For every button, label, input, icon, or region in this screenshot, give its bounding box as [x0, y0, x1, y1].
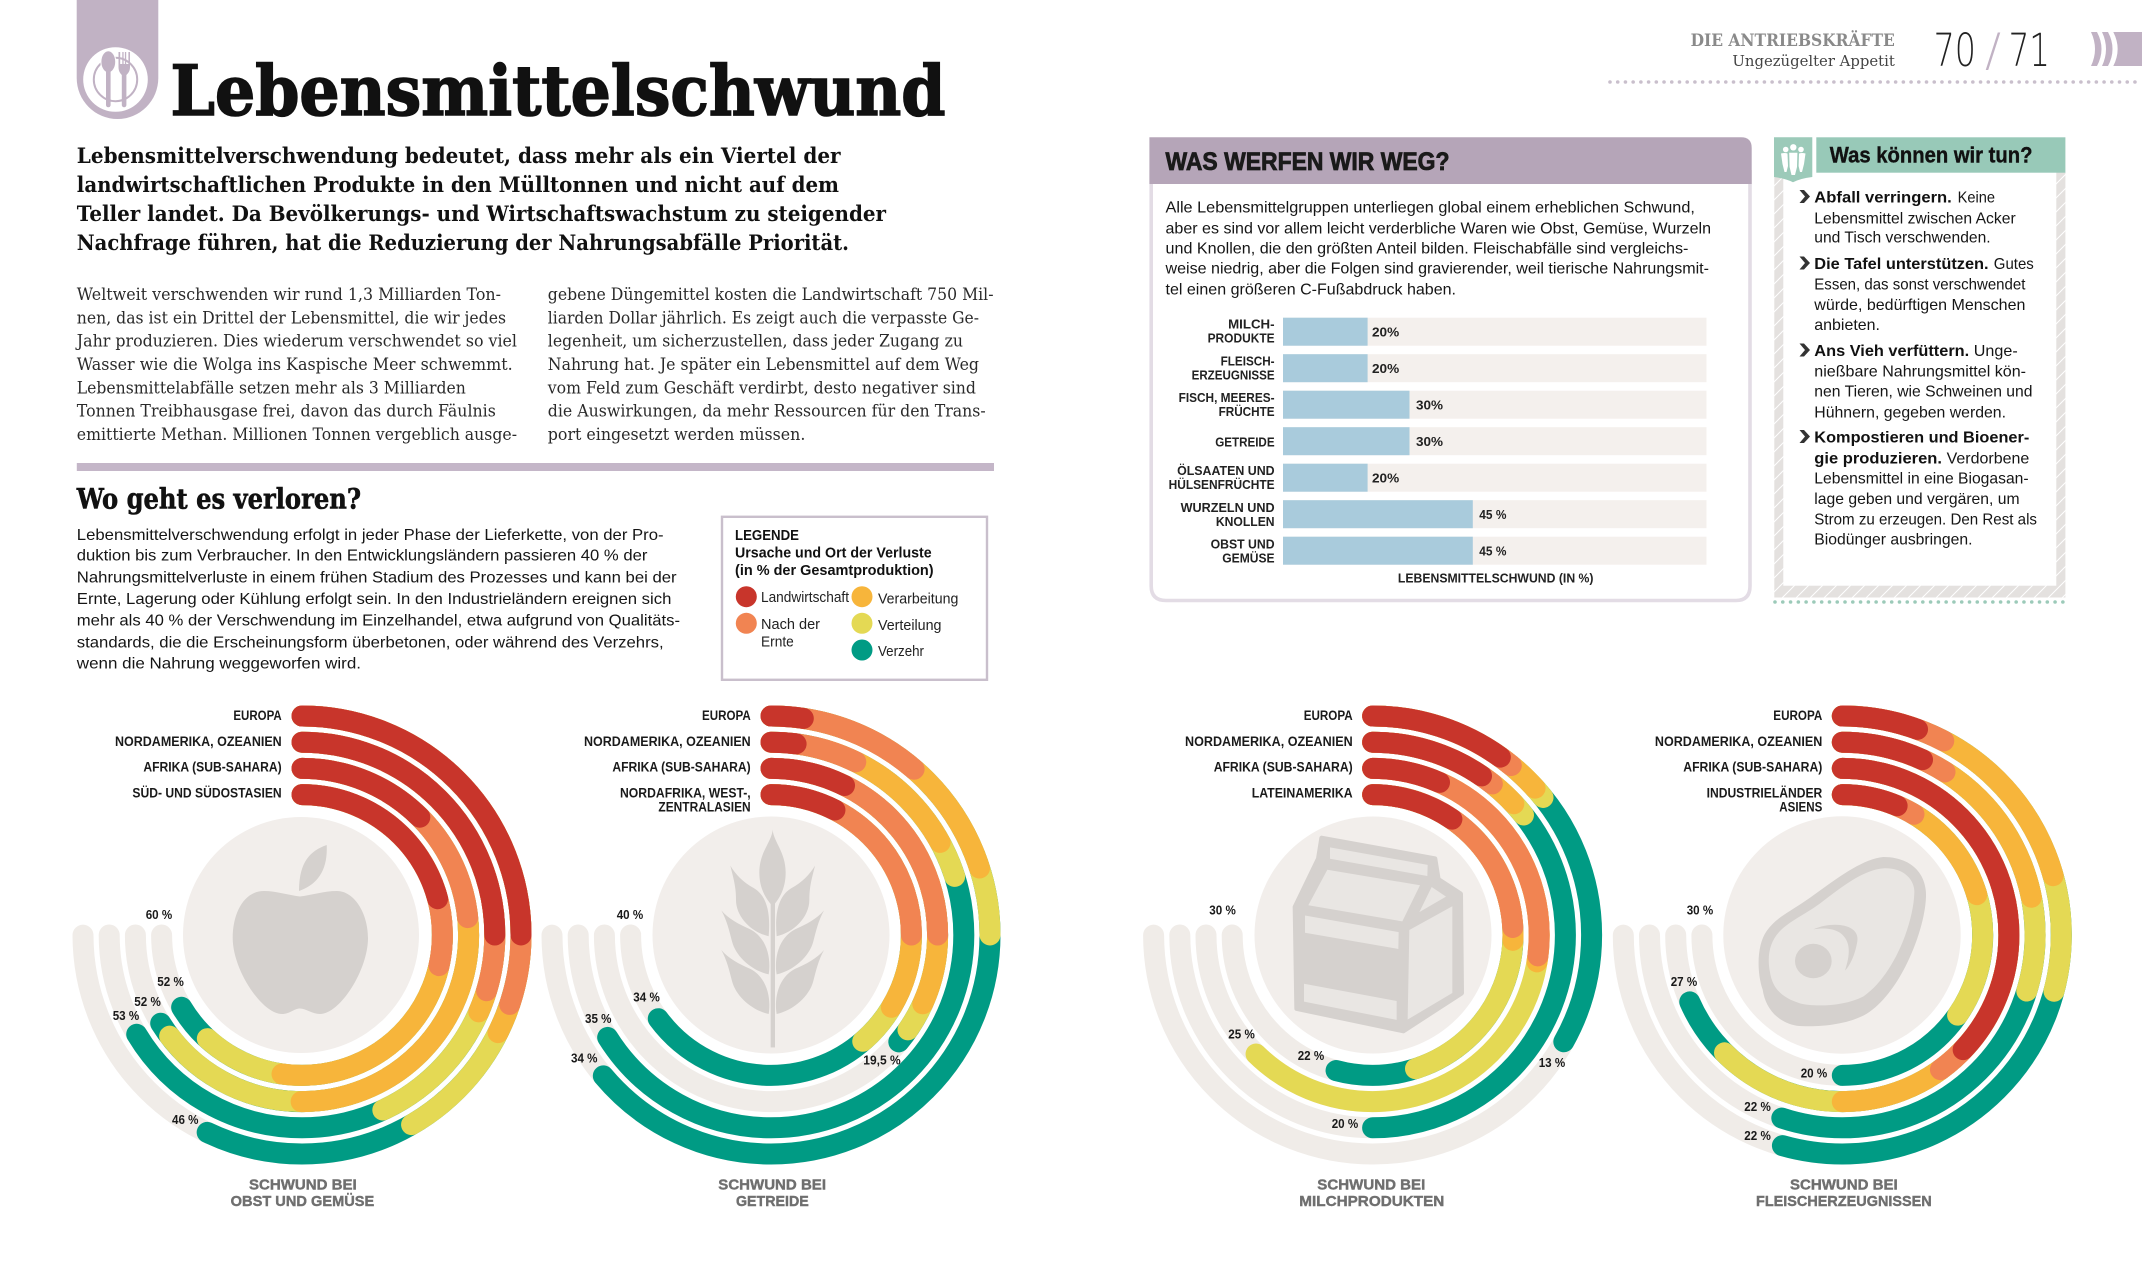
- body text column 2: legenheit, um sicherzustellen, dass jeder Zugang zu: [548, 332, 963, 351]
- panel text: aber es sind vor allem leicht verderbliche Waren wie Obst, Gemüse, Wurzeln: [1166, 220, 1711, 237]
- percent labels: [571, 907, 901, 1067]
- body text column 2: die Auswirkungen, da mehr Ressourcen für den Trans-: [548, 402, 986, 421]
- tip 3: nießbare Nahrungsmittel kön-: [1814, 364, 2026, 381]
- percent labels: 46 %: [172, 1112, 199, 1127]
- text block: supply chain: wenn die Nahrung weggeworfen wird.: [76, 655, 361, 672]
- tip 1: [1800, 190, 2016, 247]
- tip 2: Essen, das sonst verschwendet: [1814, 276, 2026, 293]
- percent labels: 34 %: [571, 1051, 598, 1066]
- region labels: AFRIKA (SUB-SAHARA): [143, 759, 282, 774]
- tip 1: Abfall verringern.: [1814, 190, 1952, 207]
- bar chart: 20%: [1372, 325, 1400, 340]
- percent labels: 30 %: [1209, 902, 1236, 918]
- icon: wheat: [721, 829, 824, 1047]
- bar chart: MILCH-: [1228, 316, 1275, 332]
- body text column 1: [75, 285, 517, 444]
- legend: Verzehr: [878, 644, 924, 660]
- heading: Wo geht es verloren: Wo geht es verloren?: [76, 482, 361, 515]
- percent labels: 13 %: [1539, 1055, 1566, 1070]
- caption: [1756, 1177, 1932, 1210]
- caption: SCHWUND BEI: [1317, 1177, 1425, 1193]
- bar chart: WURZELN UND: [1181, 500, 1275, 515]
- tip 2: anbieten.: [1814, 317, 1880, 334]
- region labels: EUROPA: [1304, 708, 1353, 723]
- caption: [1299, 1177, 1444, 1210]
- caption: [231, 1177, 375, 1210]
- caption: SCHWUND BEI: [1790, 1177, 1898, 1193]
- legend: [722, 517, 987, 680]
- page header: 70: [1934, 24, 1976, 77]
- bar chart: KNOLLEN: [1216, 514, 1275, 529]
- percent labels: 60 %: [146, 907, 173, 922]
- intro text block: Nachfrage führen, hat die Reduzierung der Nahrungsabfälle Priorität.: [77, 231, 849, 256]
- bar chart: 20%: [1372, 471, 1400, 486]
- tip 3: Ans Vieh verfüttern.: [1814, 343, 1969, 360]
- tip 3: nen Tieren, wie Schweinen und: [1814, 384, 2032, 401]
- tip 3: [1800, 343, 2032, 421]
- percent labels: 53 %: [113, 1008, 140, 1023]
- bar chart: 45 %: [1479, 544, 1507, 559]
- region labels: AFRIKA (SUB-SAHARA): [1683, 759, 1822, 774]
- tip 4: Lebensmittel in eine Biogasan-: [1814, 470, 2029, 487]
- panel: Was werfen wir weg: [1149, 137, 1752, 601]
- region labels: [1185, 708, 1353, 800]
- region labels: SÜD- UND SÜDOSTASIEN: [132, 785, 282, 800]
- page header: /: [1985, 24, 2001, 77]
- percent labels: 22 %: [1744, 1128, 1771, 1143]
- page header: 71: [2009, 24, 2050, 77]
- percent labels: [113, 907, 199, 1127]
- tip 4: Strom zu erzeugen. Den Rest als: [1814, 511, 2037, 528]
- percent labels: 52 %: [157, 974, 184, 989]
- tip 3: Hühnern, gegeben werden.: [1814, 404, 2006, 421]
- caption: GETREIDE: [736, 1194, 809, 1210]
- rings: [552, 716, 990, 1154]
- region labels: [115, 708, 282, 800]
- legend: Verarbeitung: [878, 591, 958, 607]
- chart: Milchprodukte: [1154, 708, 1592, 1210]
- percent labels: 22 %: [1744, 1099, 1771, 1114]
- tip 1: Keine: [1958, 190, 1995, 207]
- text block: supply chain: Lebensmittelverschwendung erfolgt in jeder Phase der Lieferkette, von der Pro-: [77, 527, 664, 544]
- caption: FLEISCHERZEUGNISSEN: [1756, 1194, 1932, 1210]
- panel text: und Knollen, die den größten Anteil bilden. Fleischabfälle sind vergleichs-: [1166, 240, 1688, 257]
- bar chart: 20%: [1372, 361, 1400, 376]
- text block: supply chain: [76, 527, 680, 672]
- panel text: weise niedrig, aber die Folgen sind gravierender, weil tierische Nahrungsmit-: [1164, 261, 1709, 278]
- bar chart: [1169, 316, 1706, 586]
- icon: plate with cutlery tab: [77, 0, 158, 119]
- percent labels: [1671, 902, 1828, 1143]
- legend: Verteilung: [878, 618, 942, 634]
- bar chart: FISCH, MEERES-: [1179, 390, 1275, 405]
- icon: milk carton: [1295, 838, 1462, 1031]
- body text column 2: vom Feld zum Geschäft verdirbt, desto negativer sind: [547, 378, 976, 397]
- tip 4: lage geben und vergären, um: [1814, 491, 2020, 508]
- caption: MILCHPRODUKTEN: [1299, 1194, 1444, 1210]
- caption: SCHWUND BEI: [249, 1177, 357, 1193]
- bar chart: PRODUKTE: [1208, 330, 1275, 346]
- intro text block: Teller landet. Da Bevölkerungs- und Wirtschaftswachstum zu steigender: [77, 202, 887, 227]
- percent labels: 35 %: [585, 1011, 612, 1026]
- tip 4: Biodünger ausbringen.: [1814, 531, 1972, 548]
- percent labels: 19,5 %: [863, 1052, 901, 1067]
- rings: [1154, 716, 1592, 1154]
- page header: DIE ANTRIEBSKRÄFTE: [1691, 30, 1895, 50]
- legend: Ernte: [761, 635, 794, 651]
- percent labels: 22 %: [1298, 1048, 1325, 1063]
- tip 4: [1800, 430, 2037, 548]
- region labels: [584, 708, 751, 815]
- tip 2: Gutes: [1994, 256, 2034, 273]
- bar chart: FLEISCH-: [1221, 354, 1275, 368]
- percent labels: 20 %: [1801, 1065, 1828, 1080]
- region labels: NORDAMERIKA, OZEANIEN: [115, 734, 282, 749]
- caption: OBST UND GEMÜSE: [231, 1193, 375, 1210]
- page header: Ungezügelter Appetit: [1732, 52, 1895, 70]
- bar chart: HÜLSENFRÜCHTE: [1169, 477, 1275, 492]
- bar chart: ERZEUGNISSE: [1192, 368, 1275, 382]
- percent labels: 34 %: [633, 990, 660, 1005]
- bar chart: 45 %: [1479, 507, 1507, 522]
- body text column 1: emittierte Methan. Millionen Tonnen vergeblich ausge-: [77, 425, 517, 444]
- body text column 1: Weltweit verschwenden wir rund 1,3 Milliarden Ton-: [77, 285, 501, 304]
- region labels: EUROPA: [1773, 708, 1823, 723]
- bar chart: OBST UND: [1211, 536, 1275, 552]
- percent labels: 27 %: [1671, 974, 1698, 989]
- bar chart: GETREIDE: [1215, 434, 1275, 450]
- text block: supply chain: standards, die die Erscheinungsform überbetonen, oder während des Verzehrs,: [77, 634, 664, 651]
- bar chart: 30%: [1416, 398, 1443, 413]
- legend: Landwirtschaft: [761, 590, 849, 606]
- bar chart: ÖLSAATEN UND: [1177, 463, 1275, 478]
- box heading: Was können wir tun?: [1830, 142, 2032, 167]
- body text column 2: Nahrung hat. Je später ein Lebensmittel auf dem Weg: [548, 355, 979, 374]
- region labels: EUROPA: [702, 708, 751, 723]
- icon: meat cut: [1759, 857, 1926, 1026]
- region labels: NORDAMERIKA, OZEANIEN: [584, 734, 751, 749]
- legend: LEGENDE: [735, 528, 799, 544]
- region labels: NORDAFRIKA, WEST-,: [620, 785, 751, 800]
- tip 1: Lebensmittel zwischen Acker: [1814, 210, 2016, 227]
- text block: supply chain: Nahrungsmittelverluste in einem frühen Stadium des Prozesses und kann bei der: [77, 569, 677, 586]
- body text column 1: Wasser wie die Wolga ins Kaspische Meer schwemmt.: [77, 355, 513, 374]
- panel text: [1164, 200, 1711, 298]
- text block: supply chain: duktion bis zum Verbraucher. In den Entwicklungsländern passieren 40 % der: [77, 548, 648, 565]
- region labels: LATEINAMERIKA: [1252, 785, 1353, 800]
- region labels: ASIENS: [1779, 800, 1822, 815]
- caption: [718, 1177, 826, 1210]
- panel text: Alle Lebensmittelgruppen unterliegen global einem erheblichen Schwund,: [1166, 200, 1695, 217]
- panel: Was können wir tun: [1774, 137, 2065, 602]
- body text column 1: nen, das ist ein Drittel der Lebensmittel, die wir jedes: [77, 308, 506, 327]
- text block: supply chain: mehr als 40 % der Verschwendung im Einzelhandel, etwa aufgrund von Qualitäts-: [77, 613, 680, 630]
- bar chart: FRÜCHTE: [1219, 404, 1275, 419]
- legend: Nach der: [761, 617, 820, 633]
- intro text block: landwirtschaftlichen Produkte in den Mülltonnen und nicht auf dem: [77, 173, 839, 198]
- rings: [83, 716, 521, 1154]
- body text column 2: gebene Düngemittel kosten die Landwirtschaft 750 Mil-: [548, 285, 994, 304]
- region labels: EUROPA: [233, 708, 282, 723]
- body text column 2: [547, 285, 994, 444]
- percent labels: 30 %: [1687, 902, 1714, 918]
- region labels: INDUSTRIELÄNDER: [1707, 785, 1823, 800]
- tip 4: gie produzieren.: [1814, 450, 1942, 467]
- body text column 2: port eingesetzt werden müssen.: [548, 425, 805, 444]
- icon: apple: [233, 845, 368, 1014]
- rings: [1623, 716, 2061, 1154]
- tip 2: würde, bedürftigen Menschen: [1813, 297, 2025, 314]
- text block: supply chain: Ernte, Lagerung oder Kühlung erfolgt sein. In den Industrieländern ereignen sich: [77, 591, 671, 608]
- tip 2: Die Tafel unterstützen.: [1814, 256, 1989, 273]
- bar chart: LEBENSMITTELSCHWUND (IN %): [1398, 571, 1594, 586]
- body text column 1: Tonnen Treibhausgase frei, davon das durch Fäulnis: [77, 402, 496, 421]
- percent labels: 52 %: [134, 994, 161, 1009]
- caption: SCHWUND BEI: [718, 1177, 826, 1193]
- region labels: AFRIKA (SUB-SAHARA): [612, 759, 751, 774]
- percent labels: 20 %: [1332, 1116, 1359, 1131]
- bar chart: GEMÜSE: [1222, 550, 1275, 566]
- bar chart: 30%: [1416, 434, 1443, 449]
- percent labels: 25 %: [1228, 1026, 1255, 1042]
- page header: [1610, 24, 2142, 82]
- chart: Getreide: [552, 708, 990, 1210]
- intro text block: [77, 144, 887, 256]
- region labels: AFRIKA (SUB-SAHARA): [1214, 759, 1353, 774]
- panel text: tel einen größeren C-Fußabdruck haben.: [1166, 281, 1456, 298]
- percent labels: 40 %: [617, 907, 644, 922]
- tip 4: Kompostieren und Bioener-: [1814, 430, 2029, 447]
- tip 4: Verdorbene: [1947, 450, 2029, 467]
- chart: Obst und Gemüse: [83, 708, 521, 1210]
- region labels: NORDAMERIKA, OZEANIEN: [1185, 734, 1353, 749]
- legend: (in % der Gesamtproduktion): [735, 563, 934, 579]
- intro text block: Lebensmittelverschwendung bedeutet, dass mehr als ein Viertel der: [77, 144, 841, 169]
- body text column 1: Lebensmittelabfälle setzen mehr als 3 Milliarden: [77, 378, 466, 397]
- tip 3: Unge-: [1974, 343, 2018, 360]
- title: Lebensmittelschwund: [170, 51, 946, 132]
- body text column 2: liarden Dollar jährlich. Es zeigt auch die verpasste Ge-: [548, 308, 979, 327]
- tip 1: und Tisch verschwenden.: [1814, 230, 1991, 247]
- legend: Ursache und Ort der Verluste: [735, 545, 932, 561]
- region labels: NORDAMERIKA, OZEANIEN: [1655, 734, 1822, 749]
- tip 2: [1800, 256, 2034, 334]
- region labels: [1655, 708, 1823, 815]
- body text column 1: Jahr produzieren. Dies wiederum verschwendet so viel: [75, 332, 517, 351]
- chart: Fleischerzeugnisse: [1623, 708, 2061, 1210]
- percent labels: [1209, 902, 1566, 1131]
- region labels: ZENTRALASIEN: [658, 800, 751, 815]
- icon: people tab: [1774, 137, 1812, 182]
- panel heading: WAS WERFEN WIR WEG?: [1166, 148, 1450, 176]
